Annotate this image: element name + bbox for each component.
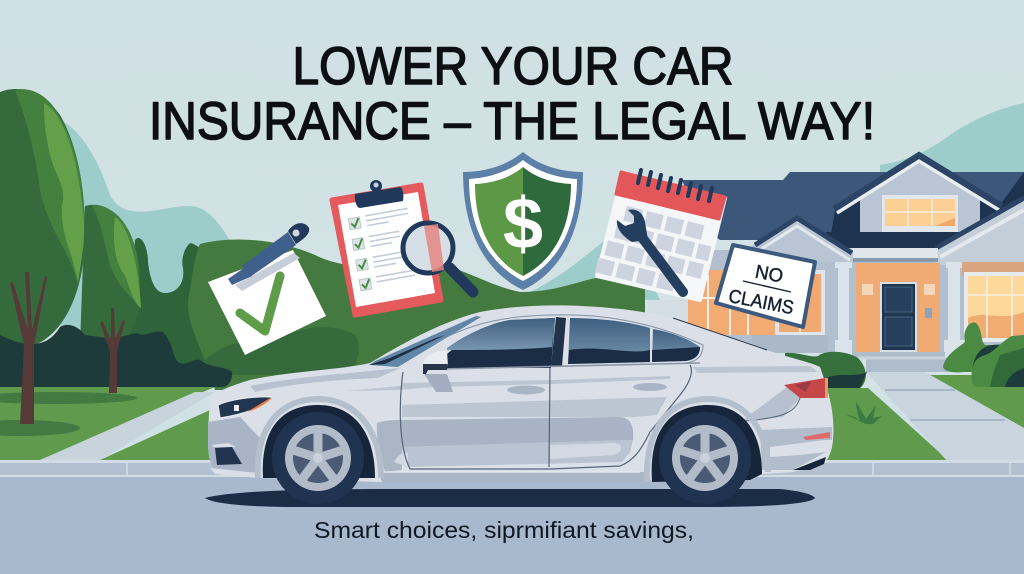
car shadow — [205, 489, 815, 507]
date grid — [595, 202, 716, 298]
shaded hill patch — [180, 327, 359, 375]
title — [149, 37, 875, 151]
lawn: left lower — [100, 410, 210, 460]
rocker — [378, 472, 652, 482]
background hills — [60, 103, 1024, 340]
dark shrub line — [0, 325, 232, 387]
rear quarter shade — [693, 366, 818, 373]
door — [880, 282, 917, 352]
door shading — [402, 397, 667, 417]
front door window — [430, 318, 555, 368]
columns — [835, 262, 964, 354]
green hill — [125, 238, 645, 390]
clip — [355, 187, 403, 208]
steps — [852, 352, 950, 372]
front grille — [215, 447, 242, 465]
wrench — [638, 232, 683, 292]
sidewalk and road — [0, 460, 1024, 574]
dollar sign: $ — [503, 184, 543, 264]
hood shade — [250, 368, 400, 392]
wheel: rear — [659, 412, 751, 504]
sign: no claims: CLAIMS — [727, 286, 795, 319]
rear deck line — [673, 318, 767, 350]
tree trunks — [10, 272, 125, 424]
left windows — [688, 270, 788, 335]
wheel: front — [272, 412, 364, 504]
side mirror — [423, 351, 448, 366]
upper gable — [860, 160, 980, 232]
front fender shade — [377, 420, 402, 472]
house — [648, 153, 1024, 372]
rear door window — [568, 318, 650, 364]
car — [208, 305, 833, 504]
title: LOWER YOUR CAR — [292, 37, 734, 96]
lawn: right — [927, 375, 1024, 428]
navy band — [826, 232, 960, 248]
sign: no claims: NO — [753, 262, 785, 288]
tail light — [784, 378, 827, 398]
lawn: center — [825, 388, 948, 460]
tree shadows — [0, 392, 137, 436]
door lights — [862, 284, 873, 295]
bush: porch left — [785, 352, 866, 388]
magnifier — [450, 268, 473, 292]
orange entry panel — [856, 263, 940, 353]
door handles — [507, 386, 545, 394]
sign: no claims — [716, 245, 815, 327]
walkway: center — [866, 372, 1024, 462]
binder rings — [638, 170, 712, 201]
body — [208, 305, 833, 482]
title: INSURANCE – THE LEGAL WAY! — [149, 92, 875, 151]
door lines — [400, 365, 691, 469]
grass tuft — [846, 402, 882, 424]
background sky — [0, 0, 1024, 400]
rear quarter window — [652, 329, 700, 362]
walkway: left — [40, 392, 215, 460]
icon: clipboard with magnifier — [332, 180, 473, 315]
bushes: right — [943, 322, 1024, 387]
icon: dollar shield — [463, 152, 583, 290]
right gable — [935, 198, 1024, 265]
caption: Smart choices, siprmifiant savings, — [314, 517, 694, 543]
tree: medium — [80, 205, 141, 350]
headlight — [218, 397, 272, 418]
pillar — [551, 317, 566, 366]
fascia — [853, 248, 938, 258]
icon: calendar with wrench — [595, 170, 725, 300]
front bumper — [208, 417, 260, 478]
windshield — [369, 316, 481, 367]
tree: large — [0, 89, 85, 346]
wheel arches — [258, 399, 381, 478]
checklist — [348, 208, 420, 291]
gable window — [882, 195, 958, 232]
icon: checked note with pen — [208, 223, 326, 355]
upper roof — [682, 172, 1024, 240]
lawn: left — [0, 387, 215, 460]
walls — [700, 250, 1024, 352]
right window — [964, 272, 1024, 342]
left lower gable — [745, 218, 855, 262]
